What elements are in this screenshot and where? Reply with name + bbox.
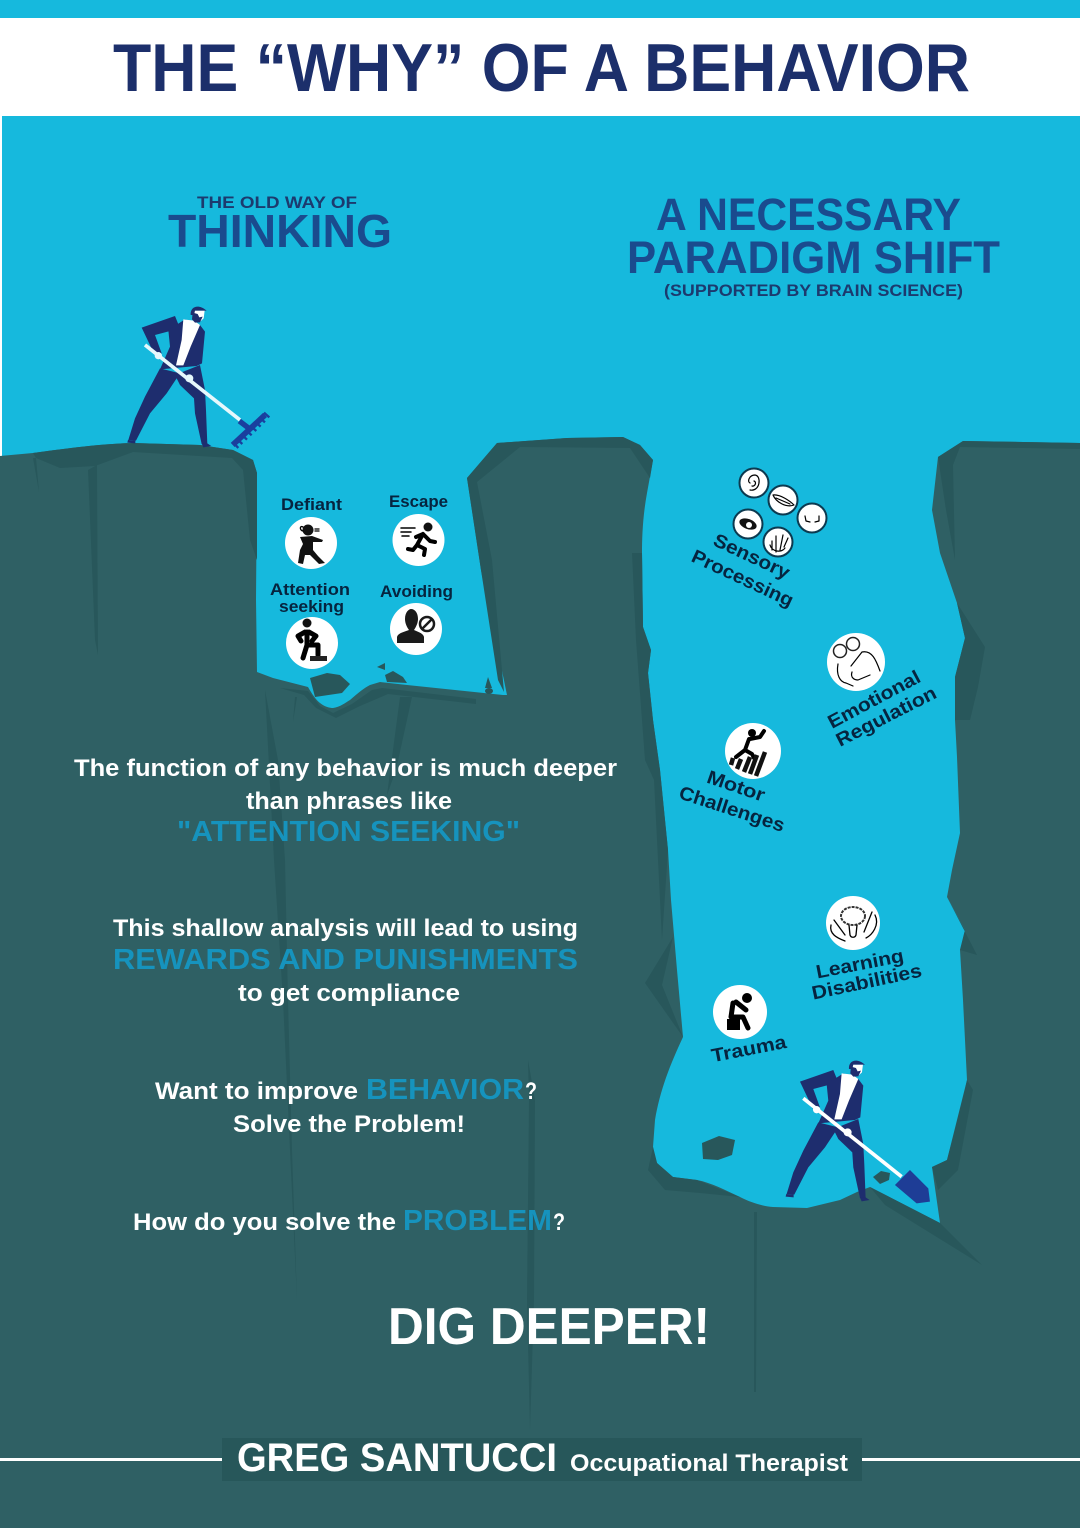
rock shading [33,437,1080,1265]
label: motor challenges: Motor [704,767,768,807]
footer lines [0,1458,1080,1461]
text block: improve behavior [155,1074,537,1138]
text block: rewards and punishments: REWARDS AND PUNISHMENTS [113,944,578,976]
behavior labels: seeking [279,597,344,616]
behavior labels: Avoiding [380,582,453,601]
shovel [803,1098,930,1203]
text block: improve behavior: Want to improve [155,1078,358,1105]
behavior labels: Escape [389,492,448,511]
icon: defiant [285,517,337,569]
icon: learning disabilities [826,896,880,950]
title: THE “WHY” OF A BEHAVIOR [113,30,970,106]
label: emotional regulation: Regulation [833,683,940,751]
heading: old way of thinking: THINKING [168,205,392,257]
label: learning disabilities: Learning [814,946,906,983]
label: sensory processing: Sensory [710,530,793,584]
footer credit: Occupational Therapist [570,1450,848,1477]
text block: solve the problem: ? [553,1209,565,1236]
heading: a necessary paradigm shift: A NECESSARY [656,189,961,240]
label: trauma: Trauma [710,1032,789,1067]
behavior labels: Attention [270,580,350,599]
icon: motor challenges [725,723,781,779]
rock near shovel [873,1171,890,1184]
icon: avoiding [390,603,442,655]
rocks in shallow pit [310,663,493,697]
icon: emotional regulation [827,633,885,691]
text block: attention seeking: "ATTENTION SEEKING" [177,816,520,848]
icon: attention seeking [286,617,338,669]
title band [0,18,1080,456]
text block: improve behavior: BEHAVIOR [366,1074,524,1106]
heading: a necessary paradigm shift [627,189,1000,300]
icon cluster: sensory [734,468,826,556]
heading: old way of thinking: THE OLD WAY OF [197,193,357,212]
label: motor challenges [676,767,787,837]
rake [145,345,269,448]
heading: a necessary paradigm shift: (SUPPORTED BY BRAIN SCIENCE) [664,281,963,300]
rock cracks [33,458,757,1430]
text block: solve the problem: How do you solve the [133,1209,396,1236]
label: emotional regulation: Emotional [824,667,924,733]
rock in deep pit [702,1136,735,1160]
man with rake [127,307,269,448]
behavior labels: Defiant [281,495,342,514]
label: learning disabilities [810,946,924,1005]
footer credit [222,1436,862,1481]
text block: rewards and punishments: This shallow analysis will lead to using [113,915,578,942]
man figure [786,1061,870,1201]
text block: attention seeking [74,755,617,848]
footer credit: GREG SANTUCCI [237,1436,557,1480]
text block: rewards and punishments [113,915,578,1007]
text block: improve behavior: Solve the Problem! [233,1111,465,1138]
icon: escape [392,514,444,566]
label: emotional regulation [824,667,940,751]
man with shovel [786,1061,930,1203]
text block: improve behavior: ? [525,1078,537,1105]
text block: attention seeking: The function of any behavior is much deeper [74,755,617,782]
behavior labels [270,492,453,616]
text block: attention seeking: than phrases like [246,788,452,815]
text block: solve the problem: PROBLEM [403,1205,552,1237]
icon: trauma [713,985,767,1039]
label: sensory processing: Processing [688,546,797,612]
heading: a necessary paradigm shift: PARADIGM SHIFT [627,232,1000,283]
text block: solve the problem [133,1205,565,1237]
text block: rewards and punishments: to get compliance [238,980,460,1007]
man figure [127,307,211,447]
label: motor challenges: Challenges [676,783,787,837]
rock mass with two pits [0,437,1080,1528]
callout: dig deeper: DIG DEEPER! [388,1298,710,1356]
label: learning disabilities: Disabilities [810,961,924,1005]
